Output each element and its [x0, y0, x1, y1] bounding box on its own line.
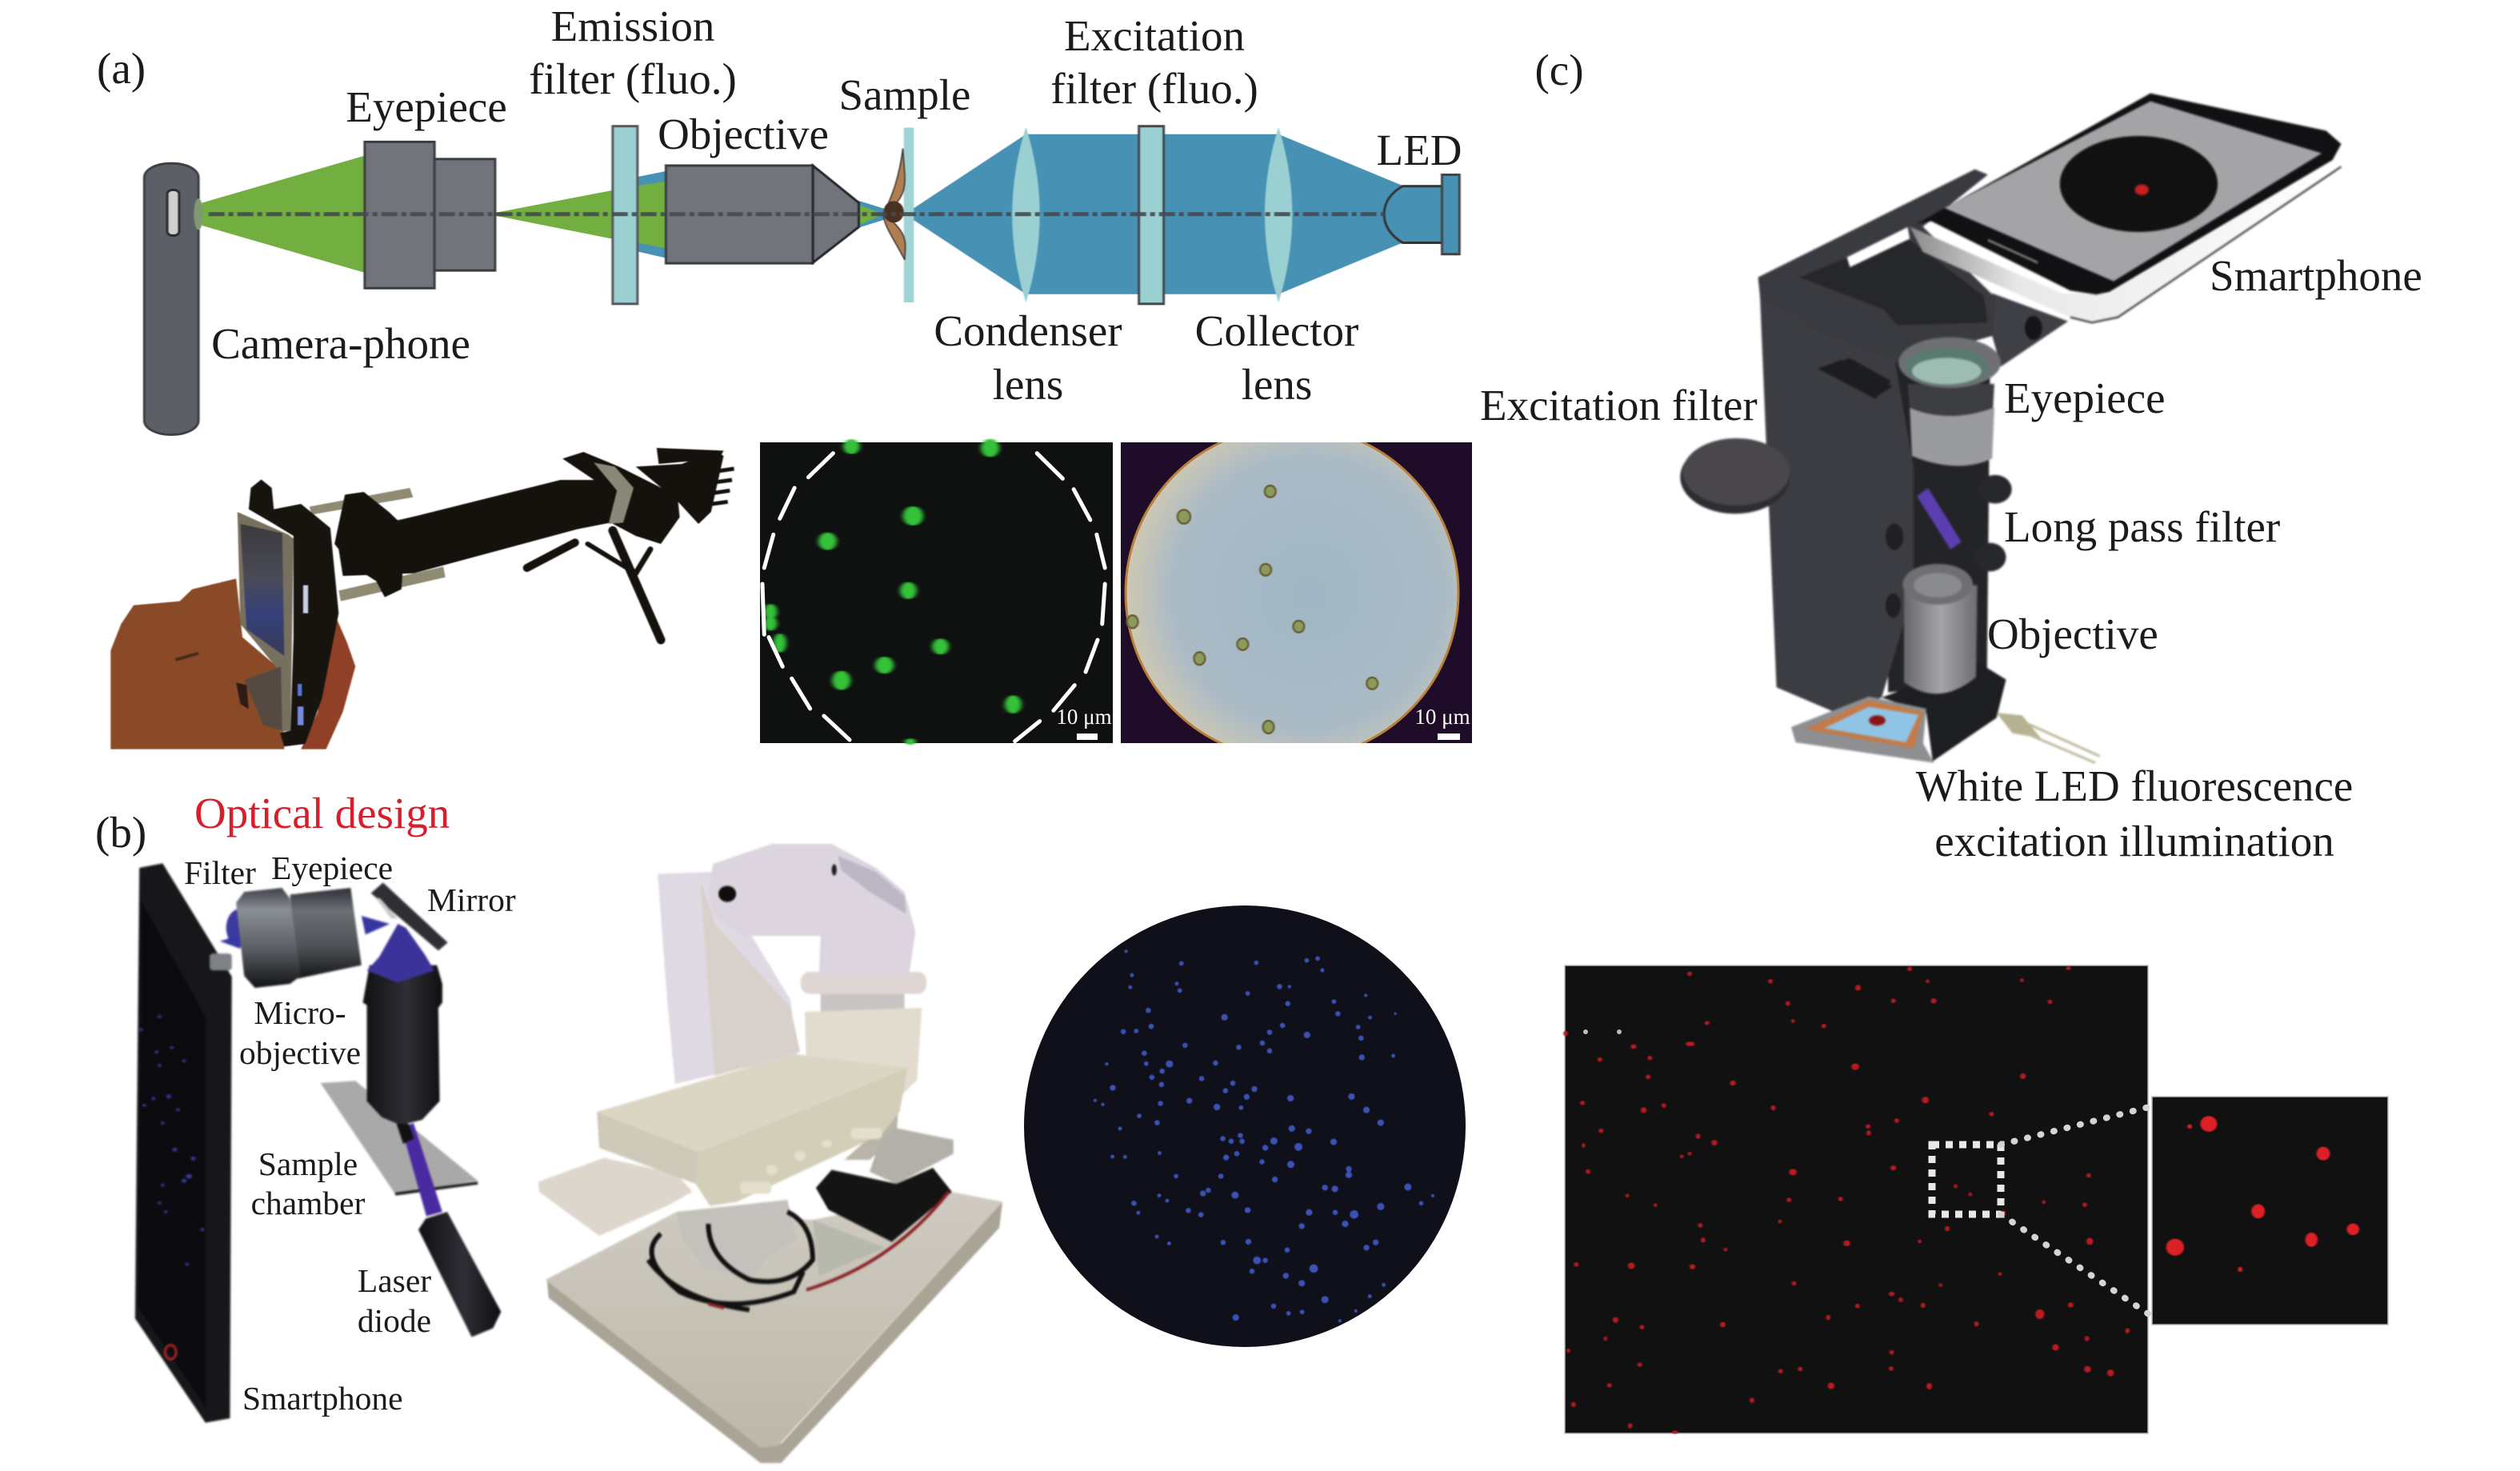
label: White LED fluorescence excitation illumination: White LED fluorescence: [1916, 761, 2353, 810]
column back wall: [1888, 335, 1990, 693]
base plate: [546, 1192, 1002, 1448]
smartphone tablet, slide and laser: [135, 863, 501, 1423]
label: Long pass filter: Long pass filter: [2004, 502, 2280, 551]
label: Eyepiece: Eyepiece: [2004, 374, 2166, 422]
upper housing, eyepiece and phone: [1758, 94, 2342, 466]
knobs: [1974, 475, 2012, 571]
blue excitation light behind objective: [637, 170, 888, 258]
horizontal box top: [597, 1054, 907, 1152]
phone side: [238, 512, 294, 732]
hand: [110, 578, 355, 749]
metal ring: [594, 462, 634, 524]
collector lens: [1265, 127, 1292, 302]
tripod legs: [527, 530, 661, 640]
sample cell: [883, 149, 906, 260]
laser beam: [402, 1123, 442, 1217]
label: Micro-objective: [239, 994, 361, 1071]
excitation filter: [1139, 126, 1164, 304]
microscope rods: [310, 488, 446, 602]
green fluorescent beads: [764, 439, 1022, 745]
eyepiece, mirror and micro-objective: [220, 882, 448, 1144]
base plate edge: [547, 1201, 1002, 1463]
panel b: blue fluorescence image: [1024, 905, 1466, 1347]
black wires: [648, 1212, 813, 1310]
home button ring: [165, 1345, 176, 1359]
label: Micro-objective: Micro-: [254, 994, 346, 1031]
label: Objective: Objective: [658, 110, 829, 158]
label: Excitation filter: filter (fluo.): [1050, 64, 1258, 113]
label: Micro-objective: objective: [239, 1034, 361, 1071]
condenser lens: [1012, 127, 1040, 302]
optical axis: [209, 212, 1384, 216]
panel c: red fluorescence image: [1563, 965, 2148, 1434]
filter slot: [1818, 358, 1891, 399]
long pass filter: [1917, 488, 1962, 550]
tablet screen: [138, 901, 206, 1407]
smartphone: [1910, 94, 2342, 322]
label: Condenser lens: Condenser: [934, 306, 1122, 355]
eyepiece front ring: [236, 888, 301, 988]
slide-out tray: [538, 1158, 693, 1236]
label: Collector lens: Collector: [1195, 306, 1358, 355]
housing holes: [1886, 523, 1903, 618]
back plate: [658, 872, 797, 1084]
scale bar: [1438, 734, 1460, 740]
filter blue ring: [226, 909, 254, 947]
housing front: [1759, 279, 1914, 712]
blue beam into objective: [367, 924, 434, 982]
phone rim: [1910, 160, 2342, 322]
label: Excitation filter: [1050, 11, 1258, 113]
panel b: 3D printed device photo: [538, 844, 1002, 1463]
label: Sample chamber: [251, 1145, 366, 1221]
rod clamp: [334, 492, 406, 598]
box pegs: [740, 1128, 882, 1193]
phone face: [240, 524, 284, 656]
red fluorescent spots: [1563, 966, 2130, 1434]
zoomed-in inset image: [2152, 1097, 2388, 1325]
eyepiece: [1898, 338, 2001, 466]
label: White LED fluorescence excitation illumination: excitation illumination: [1934, 817, 2334, 865]
green light behind objective: [637, 182, 883, 249]
label: Sample chamber: chamber: [251, 1185, 366, 1221]
sample slide: [904, 128, 914, 302]
tablet body: [135, 863, 232, 1423]
blue beam, eyepiece to mirror: [362, 916, 390, 934]
screw hole: [718, 886, 736, 902]
sample tray: [1791, 697, 1934, 763]
label: Condenser lens: lens: [993, 360, 1063, 409]
stage slab: [870, 1128, 954, 1184]
back plate side: [700, 880, 800, 1076]
phone lower keys: [245, 666, 282, 730]
stray white marks: [1583, 1029, 1622, 1034]
base plate shadow patch: [813, 1220, 886, 1276]
label: Laser diode: diode: [358, 1302, 431, 1339]
label: Excitation filter: Excitation filter: [1480, 381, 1758, 430]
objective: [1902, 564, 1978, 694]
label: Emission filter: Emission: [551, 2, 714, 50]
stage comb: [702, 469, 734, 506]
horizontal box side: [696, 1068, 907, 1206]
label: Smartphone: Smartphone: [2210, 251, 2422, 300]
small hole: [832, 864, 837, 875]
label: Collector lens: [1195, 306, 1358, 409]
housing and lower optics: [1680, 279, 2100, 763]
label: Filter: Filter: [184, 854, 256, 891]
emission filter: [613, 126, 638, 304]
right arm: [1992, 294, 2068, 366]
eyepiece: [365, 142, 495, 288]
red spot: [2135, 185, 2149, 195]
excitation filter disc: [1680, 438, 1790, 514]
LED: [1384, 174, 1459, 254]
front stage: [562, 448, 723, 544]
interior cavity: [1799, 240, 1988, 326]
label: Mirror: Mirror: [427, 881, 516, 918]
blue fluorescent spots: [1094, 949, 1434, 1322]
label: LED: LED: [1377, 126, 1462, 174]
panel label: (b): (b): [95, 808, 146, 857]
label: White LED fluorescence excitation illumination: [1916, 761, 2353, 865]
micro-objective body: [363, 965, 442, 1125]
label: Condenser lens: [934, 306, 1122, 409]
panel a: fluorescence micrograph: [760, 439, 1113, 745]
panel c: smartphone attachment illustration: [1680, 94, 2342, 763]
label: Laser diode: Laser: [358, 1262, 431, 1299]
label: Emission filter: filter (fluo.): [529, 54, 737, 103]
red wire: [708, 1192, 949, 1308]
side knob: [210, 953, 232, 970]
laser diode: [418, 1212, 501, 1337]
neck: [821, 992, 905, 1012]
mirror: [371, 882, 448, 950]
white LED: [1997, 713, 2100, 763]
label: Laser diode: [358, 1262, 431, 1339]
collar: [801, 972, 926, 993]
white dashed field-of-view circle: [762, 454, 1105, 741]
phone holder: [249, 479, 338, 746]
label: Collector lens: lens: [1242, 360, 1312, 409]
battery box: [816, 1168, 952, 1241]
scale bar label: 10 μm: [1056, 705, 1112, 729]
microscope tube: [337, 480, 610, 576]
objective nose: [397, 1124, 414, 1144]
elbow opening: [838, 856, 906, 913]
inset red spots: [2166, 1116, 2359, 1272]
label: Sample: Sample: [839, 70, 970, 119]
label: Eyepiece: Eyepiece: [346, 82, 507, 131]
blue dots on phone screen: [139, 1015, 204, 1265]
green emission light cone, phone to eyepiece: [202, 156, 365, 273]
label: Smartphone: Smartphone: [242, 1380, 403, 1417]
phone screen: [1945, 102, 2322, 282]
eyepiece rear cylinder: [290, 888, 362, 978]
bright circular field: [1126, 426, 1458, 759]
green emission light cone, eyepiece to filter: [495, 190, 614, 239]
panel b: optical design illustration: [135, 863, 501, 1423]
heading: Optical design: Optical design: [194, 789, 450, 837]
horizontal box end: [597, 1112, 699, 1184]
scale bar label: 10 μm: [1414, 705, 1470, 729]
beads: [1127, 486, 1378, 734]
label: Sample chamber: Sample: [258, 1145, 358, 1182]
elbow: [708, 844, 915, 974]
lower column: [677, 1200, 797, 1280]
brand mark: [1988, 240, 2038, 262]
screen viewing circle: [2060, 136, 2218, 232]
label: Objective: Objective: [1987, 610, 2158, 658]
top housing: [1758, 170, 1997, 362]
side slot: [1818, 360, 1893, 398]
panel a: photo of handheld microscope: [110, 448, 734, 749]
scale bar: [1077, 734, 1098, 740]
panel a: optical schematic diagram: [144, 126, 1459, 434]
white slot: [1847, 227, 1910, 267]
blue excitation beam: [911, 134, 1402, 294]
panel label: (a): (a): [97, 44, 146, 93]
label: Camera-phone: Camera-phone: [211, 319, 470, 368]
blue spike: [220, 934, 242, 949]
label: Emission filter: [529, 2, 737, 103]
sample chamber slide: [321, 1081, 478, 1194]
right column: [844, 1112, 898, 1160]
panel label: (c): (c): [1534, 46, 1584, 94]
label: Eyepiece: Eyepiece: [271, 849, 393, 886]
camera phone: [144, 163, 203, 434]
phone side buttons: [298, 586, 308, 726]
label: Excitation filter: Excitation: [1064, 11, 1245, 60]
panel a: bright-field micrograph: [1121, 426, 1472, 759]
zoom callout: dotted square and connector lines: [1932, 1107, 2149, 1314]
arm hole: [2025, 316, 2042, 340]
phone front: [1916, 94, 2342, 294]
objective: [666, 166, 859, 263]
vertical tube: [805, 1008, 922, 1096]
lower stage: [1882, 662, 2006, 761]
